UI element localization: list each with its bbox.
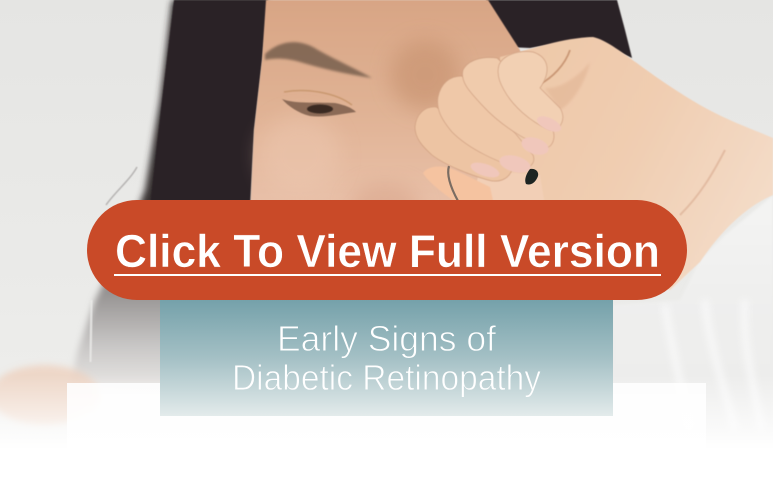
little finger bbox=[415, 107, 512, 181]
blurred arm at lower left bbox=[0, 365, 100, 425]
hand and wrist bbox=[500, 37, 773, 290]
cheek highlight bbox=[260, 115, 340, 195]
title line 1: Early Signs of bbox=[277, 318, 497, 359]
ring finger bbox=[438, 76, 534, 168]
title line 2: Diabetic Retinopathy bbox=[232, 357, 541, 398]
middle finger bbox=[462, 58, 554, 148]
stray hair wisp bbox=[106, 167, 137, 205]
nose and cheek shading bbox=[350, 183, 420, 227]
face bbox=[250, 0, 540, 215]
sleeve bbox=[613, 195, 773, 440]
button underline bbox=[114, 274, 661, 276]
white base bbox=[0, 450, 773, 500]
thumb ink mark bbox=[448, 166, 458, 201]
hair, left side bbox=[70, 0, 268, 400]
black painted nail bbox=[525, 169, 538, 185]
thumb base bbox=[470, 170, 545, 205]
eyelid crease bbox=[284, 91, 352, 105]
fingernails bbox=[469, 113, 563, 180]
sleeve folds bbox=[665, 300, 762, 430]
palm shadow bbox=[545, 62, 590, 110]
eye lash line bbox=[282, 99, 356, 117]
cable bbox=[90, 300, 92, 362]
bottom white fade bbox=[0, 375, 773, 450]
teal title panel bbox=[160, 295, 613, 416]
wrist line bbox=[680, 150, 725, 215]
hair, right side bbox=[486, 0, 632, 58]
iris bbox=[307, 104, 333, 114]
index finger bbox=[498, 52, 563, 130]
pale lower panel bbox=[67, 383, 706, 500]
palm crease bbox=[540, 50, 570, 84]
shaded temple beside hand bbox=[390, 40, 460, 110]
eyebrow bbox=[265, 42, 372, 78]
thumb bbox=[423, 166, 494, 205]
hair crisp upper core bbox=[150, 0, 268, 205]
call to action button bbox=[87, 200, 687, 300]
button label: Click To View Full Version bbox=[115, 225, 660, 277]
